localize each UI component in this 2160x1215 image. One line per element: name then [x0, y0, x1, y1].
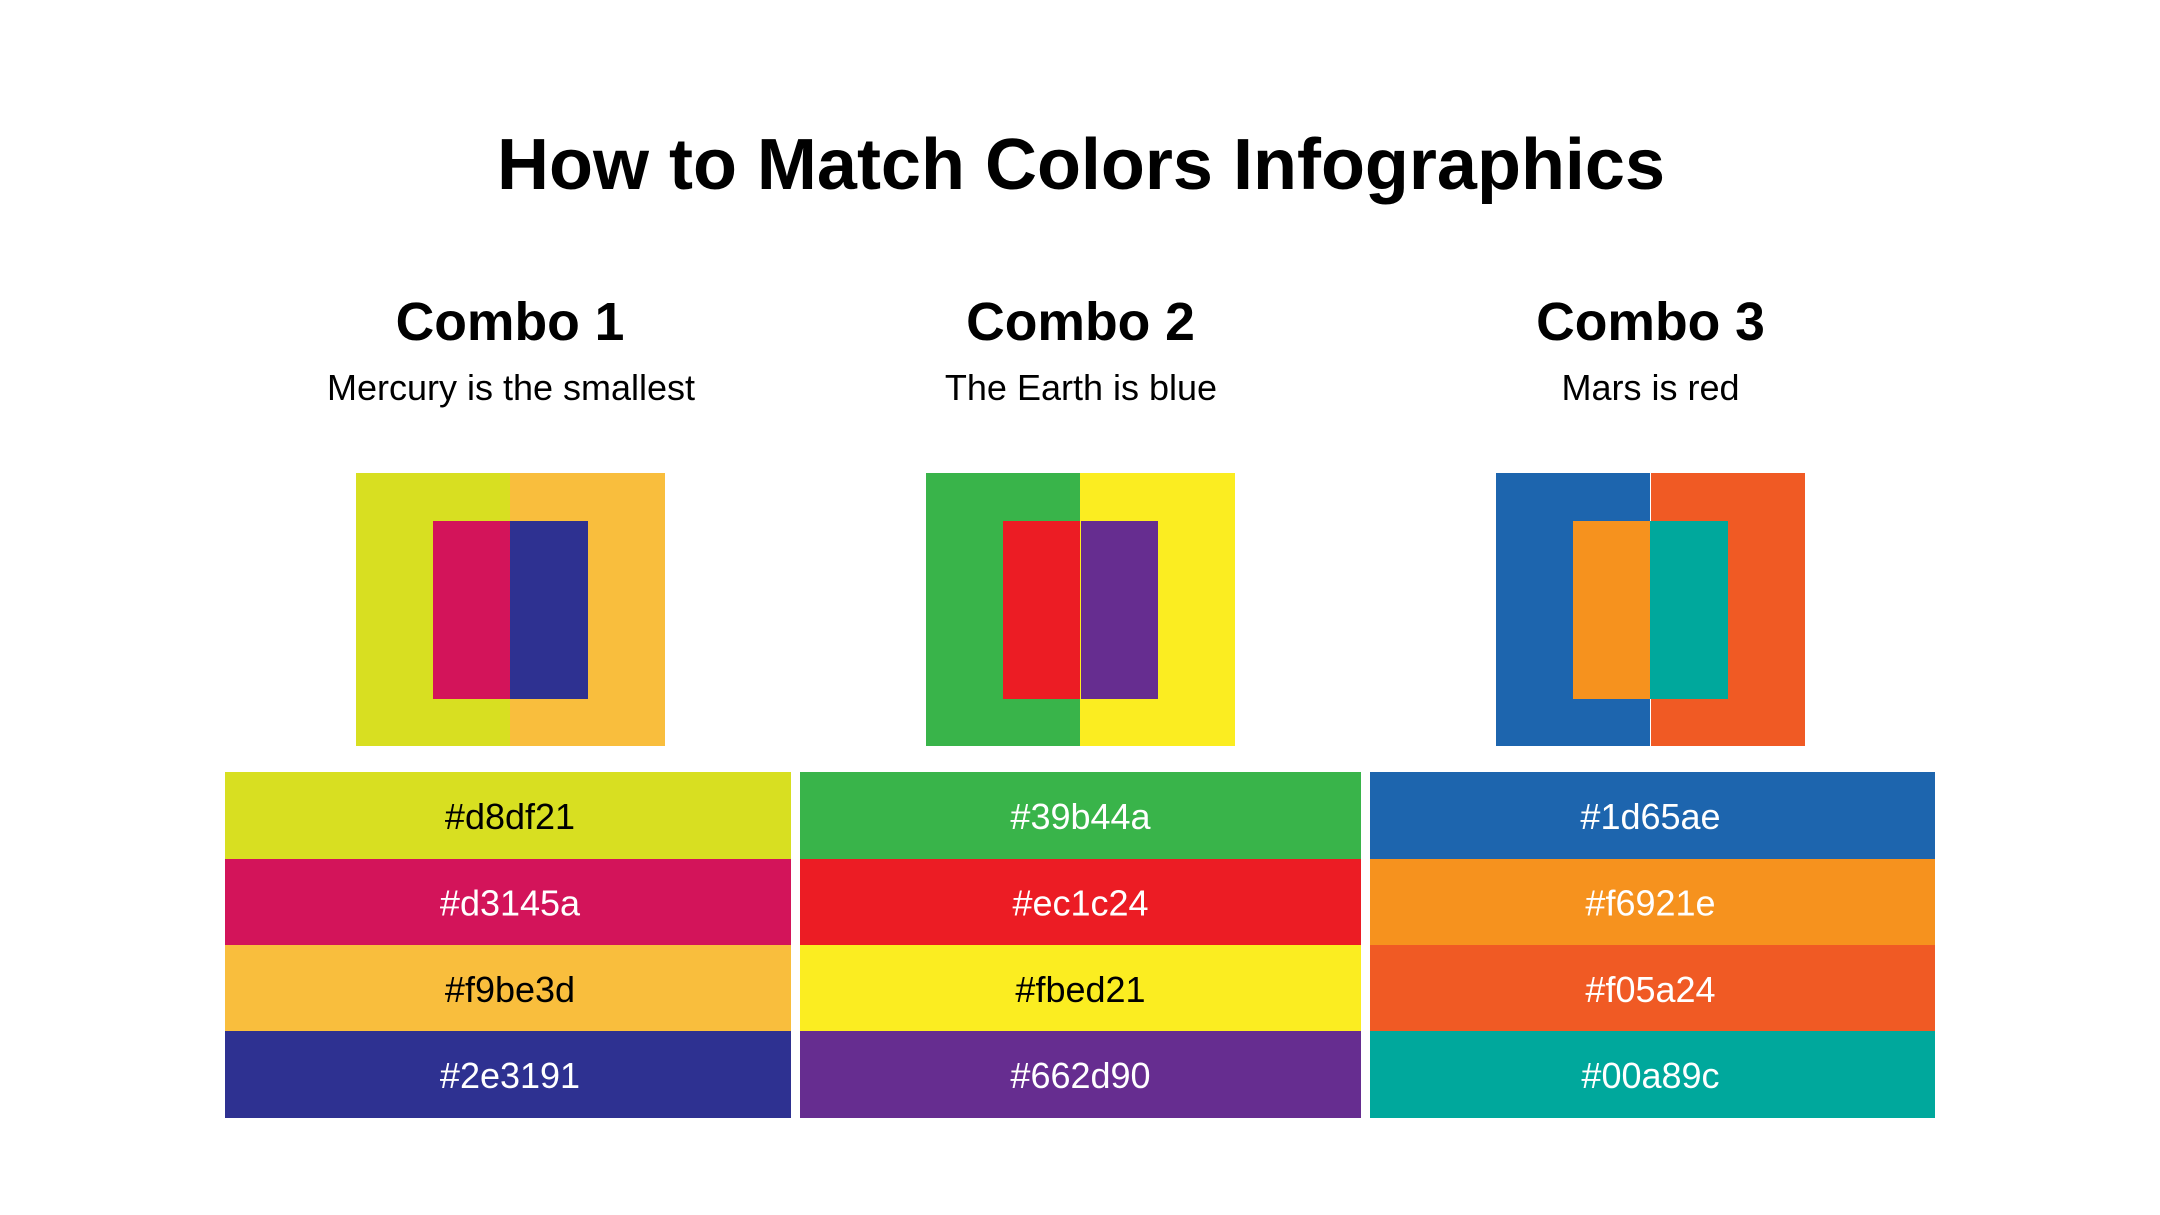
- color row: f9be3d: #f9be3d: [445, 969, 575, 1010]
- color row: 2e3191: #2e3191: [440, 1055, 580, 1096]
- color row: 00a89c: #00a89c: [1581, 1055, 1720, 1096]
- color row: d3145a: #d3145a: [440, 882, 581, 924]
- color row: 2e3191: [225, 1031, 791, 1118]
- heading: combo 2: Combo 2: [966, 293, 1195, 352]
- text: combo 3 description: Mars is red: [1561, 367, 1740, 408]
- color row: 662d90: [800, 1031, 1361, 1118]
- color row: 1d65ae: #1d65ae: [1580, 796, 1721, 837]
- color row: fbed21: [800, 945, 1361, 1031]
- color row: d8df21: #d8df21: [445, 796, 575, 837]
- swatch: combo 2 nested squares: [926, 473, 1235, 746]
- color row: 39b44a: [800, 772, 1361, 859]
- color row: 662d90: #662d90: [1010, 1055, 1151, 1096]
- title: How to Match Colors Infographics: [497, 125, 1665, 205]
- panel: combo 2: [800, 293, 1361, 1118]
- color row: ec1c24: [800, 859, 1361, 945]
- color row: 1d65ae: [1370, 772, 1935, 859]
- heading: combo 3: Combo 3: [1536, 293, 1765, 352]
- color row: f05a24: [1370, 945, 1935, 1031]
- swatch: combo 1 nested squares: [356, 473, 665, 746]
- swatch: combo 3 nested squares: [1496, 473, 1805, 746]
- color list: combo 3: [1370, 772, 1935, 1118]
- text: combo 2 description: The Earth is blue: [945, 367, 1217, 408]
- color row: fbed21: #fbed21: [1015, 969, 1146, 1010]
- color list: combo 2: [800, 772, 1361, 1118]
- color row: 00a89c: [1370, 1031, 1935, 1118]
- heading: combo 1: Combo 1: [396, 293, 624, 352]
- color row: f9be3d: [225, 945, 791, 1031]
- color row: d3145a: [225, 859, 791, 945]
- panel: combo 1: [225, 293, 791, 1118]
- color row: ec1c24: #ec1c24: [1012, 882, 1149, 924]
- color row: f6921e: [1370, 859, 1935, 945]
- panel: combo 3: [1370, 293, 1935, 1118]
- color row: 39b44a: #39b44a: [1010, 796, 1152, 837]
- color row: d8df21: [225, 772, 791, 859]
- color row: f6921e: #f6921e: [1585, 882, 1716, 924]
- color row: f05a24: #f05a24: [1585, 969, 1716, 1010]
- text: combo 1 description: Mercury is the smallest: [327, 367, 695, 408]
- color list: combo 1: [225, 772, 791, 1118]
